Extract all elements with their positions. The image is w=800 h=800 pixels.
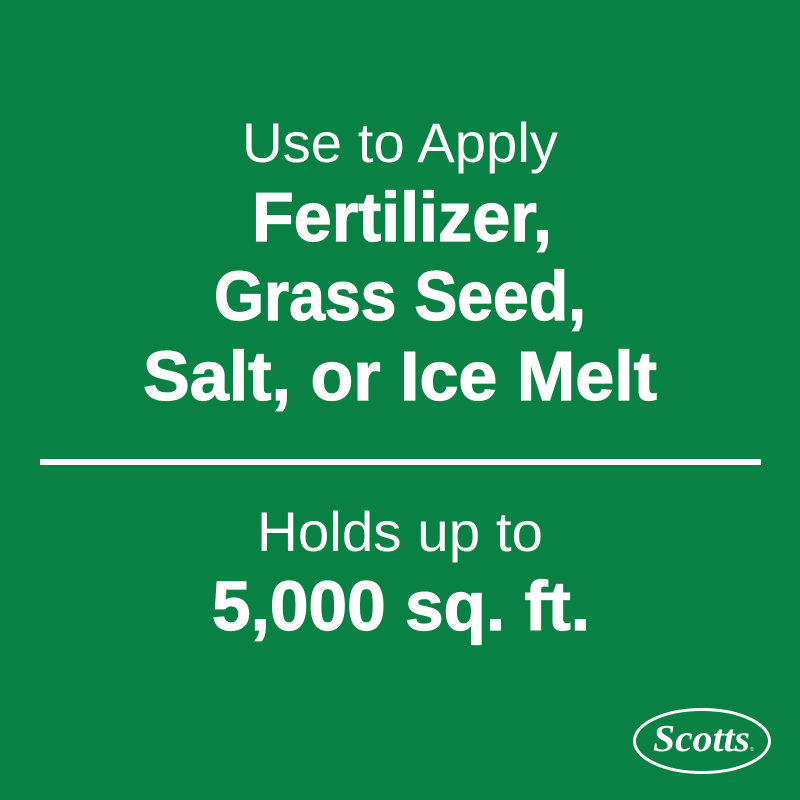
line: salt or ice melt: Salt, or Ice Melt: [143, 337, 657, 415]
text block: product list: [143, 178, 657, 415]
line: fertilizer: Fertilizer,: [252, 178, 552, 256]
divider line: [40, 459, 761, 465]
heading: use to apply: Use to Apply: [242, 111, 558, 174]
line: grass seed: Grass Seed,: [214, 257, 586, 335]
logo: Scotts: [634, 710, 770, 772]
heading: holds up to: Holds up to: [257, 500, 543, 563]
logo: Scotts: ®: [750, 746, 754, 753]
logo: Scotts: Scotts: [653, 718, 750, 760]
capacity value: 5,000 sq. ft.: [212, 567, 590, 645]
